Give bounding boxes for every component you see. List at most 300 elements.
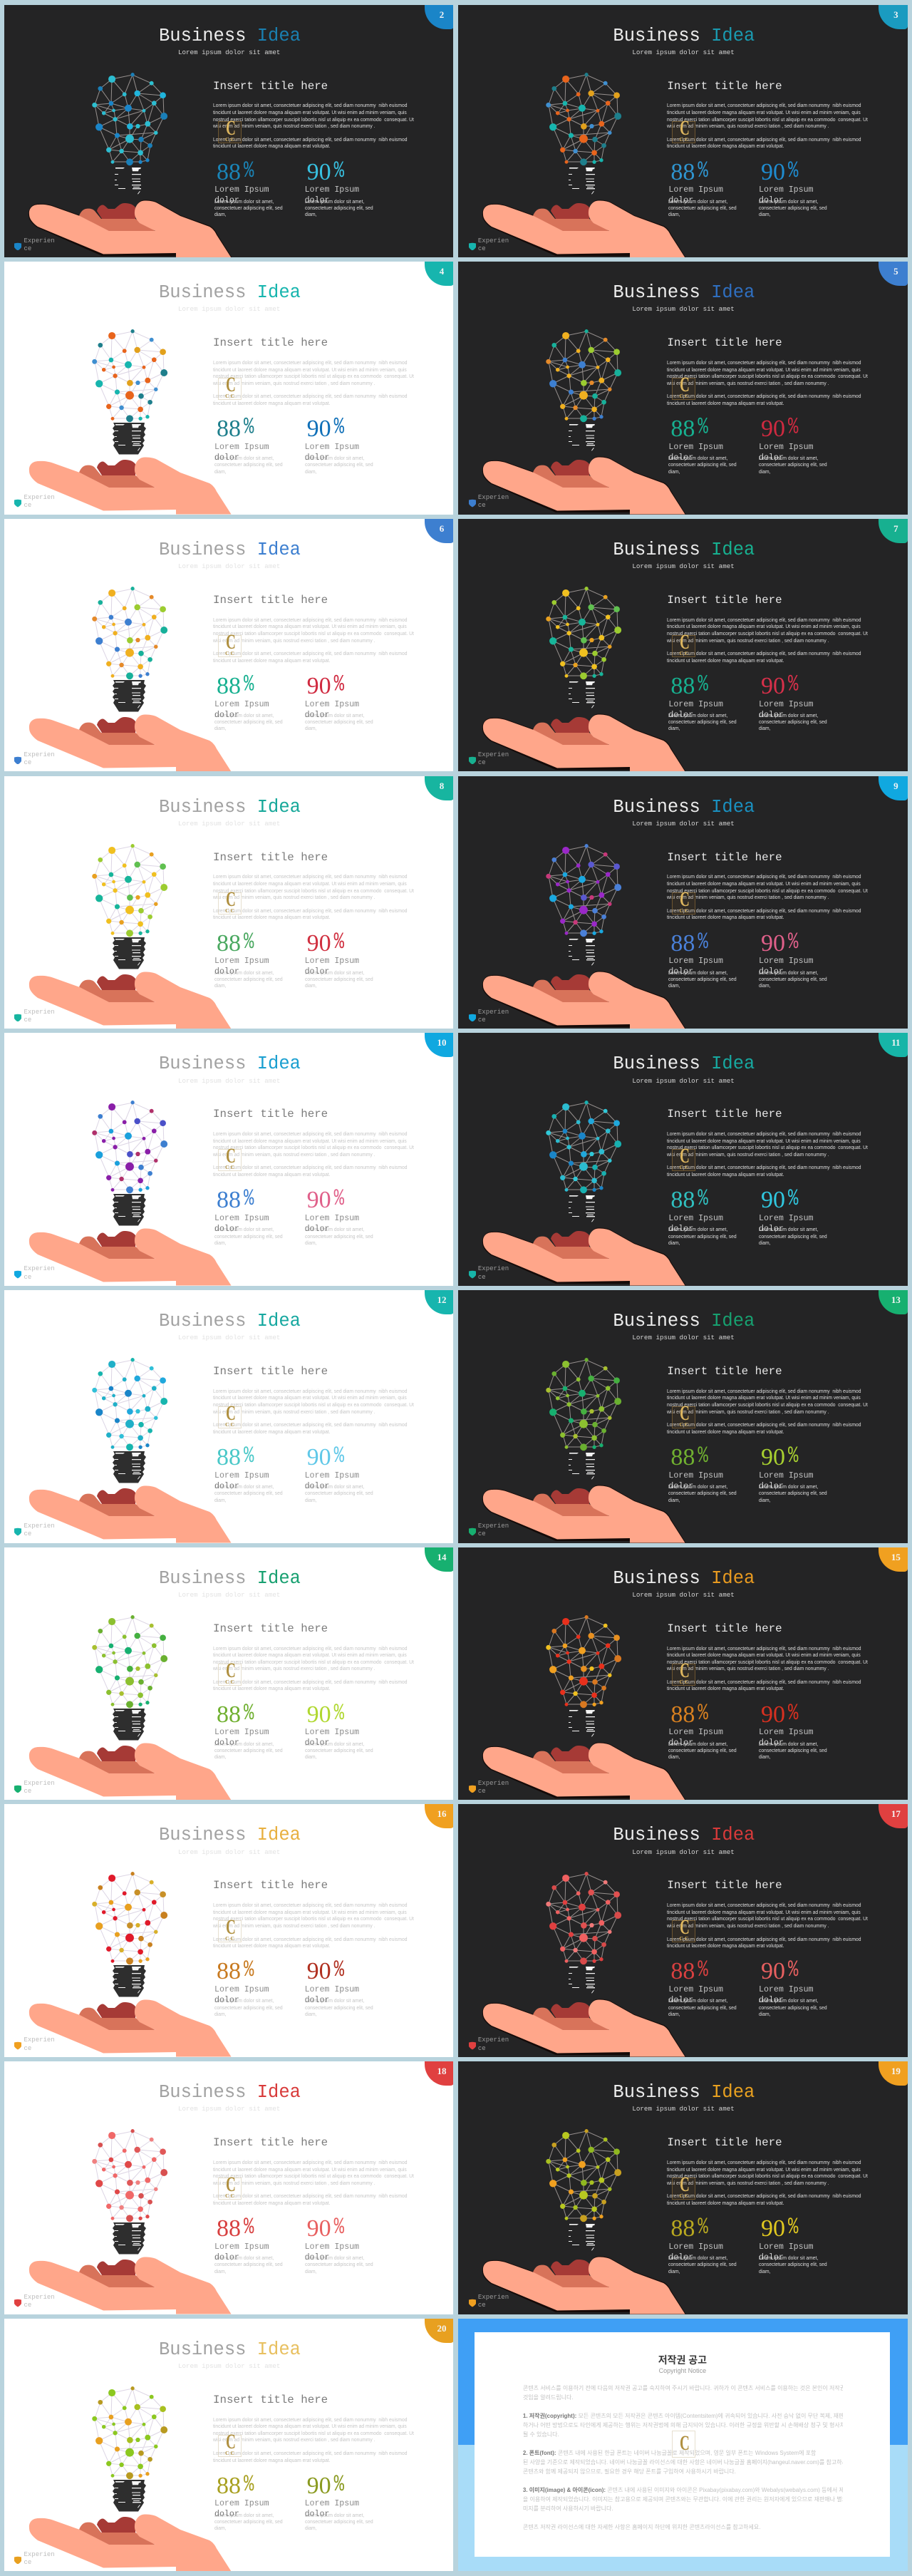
title: Business Idea: [613, 1825, 755, 1845]
stat 90 percent: %: [334, 415, 344, 441]
footer brand: Experien ce: [24, 751, 55, 766]
stat 88 percent: %: [698, 1701, 708, 1726]
watermark: C: [226, 1144, 235, 1168]
notice subtitle: Copyright Notice: [659, 2367, 706, 2374]
title: Business Idea: [613, 282, 755, 303]
title: Business Idea: [613, 1568, 755, 1589]
stat 88 percent: Lorem ipsum dolor sit amet, consectetuer adipiscing elit, sed diam,: [214, 1741, 283, 1760]
illustration: hand: [480, 1483, 688, 1542]
stat 90 percent: Lorem ipsum dolor sit amet, consectetuer adipiscing elit, sed diam,: [305, 1483, 373, 1503]
stat 90 percent: 90: [307, 1444, 331, 1470]
title: Business Idea: [159, 2082, 301, 2103]
stat 88 percent: %: [244, 929, 254, 955]
stat 88 percent: Lorem ipsum dolor sit amet, consectetuer adipiscing elit, sed diam,: [668, 455, 737, 475]
icon: shield: [14, 757, 21, 764]
stat 88 percent: 88: [217, 930, 241, 957]
stat 88 percent: dolor: [214, 711, 239, 720]
stat 88 percent: Lorem Ipsum: [214, 957, 269, 966]
slide 18: [4, 2061, 453, 2314]
icon: shield: [14, 2556, 21, 2564]
icon: shield: [469, 2299, 476, 2307]
illustration: hand: [482, 200, 685, 257]
icon: lightbulb network: [92, 587, 168, 711]
watermark: C: [680, 1915, 690, 1939]
page number badge: [879, 1290, 908, 1314]
stat 88 percent: [214, 2216, 303, 2277]
body text: Lorem ipsum dolor sit amet, consectetuer adipiscing elit, sed diam nonummy nibh euismod tincidunt ut laoreet dolore magna aliquam erat volutpat. Ut wisi enim ad minim veniam, quis nostrud exerci tation ullamcorper suscipit lobortis nisl ut aliquip ex ea commodo consequat. Ut wisi enim ad minim veniam, quis nostrud exerci tation , sed diam nonummy .: [213, 2416, 414, 2443]
illustration: hand: [28, 458, 231, 515]
footer brand: Experien ce: [24, 2294, 55, 2309]
stat 88 percent: Lorem ipsum dolor sit amet, consectetuer adipiscing elit, sed diam,: [668, 1997, 737, 2017]
watermark: [672, 121, 695, 143]
page number badge: [879, 1547, 908, 1572]
watermark: [218, 1149, 242, 1171]
stat 88 percent: Lorem Ipsum: [214, 2242, 269, 2252]
body text second paragraph: Lorem ipsum dolor sit amet, consectetuer adipiscing elit, sed diam nonummy nibh euismod tincidunt ut laoreet dolore magna aliquam erat volutpat.: [213, 136, 407, 149]
stat 90 percent: [304, 2216, 393, 2277]
watermark: [218, 2178, 242, 2200]
icon: shield: [469, 2041, 476, 2050]
stat 88 percent: Lorem Ipsum: [214, 2499, 269, 2508]
stat 88 percent: %: [244, 1443, 254, 1470]
body text second paragraph: Lorem ipsum dolor sit amet, consectetuer adipiscing elit, sed diam nonummy nibh euismod tincidunt ut laoreet dolore magna aliquam erat volutpat.: [213, 1421, 407, 1435]
stat 88 percent: 88: [670, 1701, 695, 1728]
icon: shield: [469, 1270, 476, 1279]
watermark: [218, 2435, 242, 2457]
page number badge: 19: [891, 2066, 901, 2076]
stat 90 percent: %: [788, 158, 798, 184]
page number badge: [879, 262, 908, 286]
stat 90 percent: %: [334, 672, 344, 698]
title: Business Idea: [159, 282, 301, 303]
stat 90 percent: Lorem Ipsum: [759, 957, 814, 966]
watermark: [218, 1664, 242, 1686]
body text second paragraph: Lorem ipsum dolor sit amet, consectetuer adipiscing elit, sed diam nonummy nibh euismod tincidunt ut laoreet dolore magna aliquam erat volutpat.: [667, 1421, 861, 1435]
section heading: Insert title here: [667, 851, 782, 864]
illustration: hand: [26, 2511, 234, 2571]
stat 90 percent: dolor: [759, 2253, 784, 2262]
stat 88 percent: Lorem ipsum dolor sit amet, consectetuer adipiscing elit, sed diam,: [668, 198, 737, 217]
stat 90 percent: Lorem ipsum dolor sit amet, consectetuer adipiscing elit, sed diam,: [305, 1226, 373, 1246]
icon: shield: [14, 2299, 21, 2307]
stat 90 percent: 90: [307, 1187, 331, 1213]
body text second paragraph: Lorem ipsum dolor sit amet, consectetuer adipiscing elit, sed diam nonummy nibh euismod tincidunt ut laoreet dolore magna aliquam erat volutpat.: [667, 2193, 861, 2206]
stat 90 percent: Lorem Ipsum: [305, 1471, 359, 1480]
stat 90 percent: [304, 1959, 393, 2019]
section heading: Insert title here: [213, 336, 328, 349]
watermark: [672, 1406, 695, 1428]
stat 90 percent: Lorem ipsum dolor sit amet, consectetuer adipiscing elit, sed diam,: [759, 198, 827, 217]
title: Business Idea: [613, 797, 755, 818]
subtitle: Lorem ipsum dolor sit amet: [178, 1334, 280, 1341]
stat 90 percent: dolor: [759, 1996, 784, 2005]
body text second paragraph: Lorem ipsum dolor sit amet, consectetuer adipiscing elit, sed diam nonummy nibh euismod tincidunt ut laoreet dolore magna aliquam erat volutpat.: [667, 393, 861, 406]
stat 88 percent: Lorem ipsum dolor sit amet, consectetuer adipiscing elit, sed diam,: [214, 1226, 283, 1246]
icon: lightbulb network: [90, 2383, 175, 2518]
page number badge: 15: [891, 1552, 901, 1562]
stat 88 percent: Lorem Ipsum: [668, 1214, 723, 1223]
stat 88 percent: dolor: [668, 1225, 693, 1234]
stat 90 percent: Lorem ipsum dolor sit amet, consectetuer adipiscing elit, sed diam,: [305, 198, 373, 217]
body text second paragraph: Lorem ipsum dolor sit amet, consectetuer adipiscing elit, sed diam nonummy nibh euismod tincidunt ut laoreet dolore magna aliquam erat volutpat.: [213, 2193, 407, 2206]
stat 90 percent: dolor: [305, 967, 329, 977]
illustration: hand: [26, 2254, 234, 2314]
watermark: CC: [225, 650, 236, 656]
icon: lightbulb network: [92, 73, 168, 194]
stat 90 percent: Lorem ipsum dolor sit amet, consectetuer adipiscing elit, sed diam,: [759, 1226, 827, 1246]
slide 20: [4, 2319, 453, 2571]
stat 88 percent: %: [244, 1957, 254, 1984]
stat 88 percent: dolor: [214, 1225, 239, 1234]
stat 88 percent: Lorem ipsum dolor sit amet, consectetuer adipiscing elit, sed diam,: [214, 969, 283, 989]
stat 88 percent: [668, 931, 757, 991]
illustration: hand: [28, 972, 231, 1029]
watermark: C: [680, 1401, 690, 1425]
footer brand: Experien ce: [24, 2036, 55, 2052]
stat 90 percent: Lorem ipsum dolor sit amet, consectetuer adipiscing elit, sed diam,: [305, 969, 373, 989]
stat 90 percent: 90: [307, 2473, 331, 2499]
stat 90 percent: %: [788, 2215, 798, 2241]
subtitle: Lorem ipsum dolor sit amet: [632, 1591, 735, 1599]
subtitle: Lorem ipsum dolor sit amet: [632, 2105, 735, 2113]
icon: lightbulb network: [546, 329, 621, 450]
subtitle: Lorem ipsum dolor sit amet: [178, 2362, 280, 2370]
body text: Lorem ipsum dolor sit amet, consectetuer adipiscing elit, sed diam nonummy nibh euismod tincidunt ut laoreet dolore magna aliquam erat volutpat. Ut wisi enim ad minim veniam, quis nostrud exerci tation ullamcorper suscipit lobortis nisl ut aliquip ex ea commodo consequat. Ut wisi enim ad minim veniam, quis nostrud exerci tation , sed diam nonummy .: [667, 102, 868, 129]
stat 88 percent: 88: [217, 1701, 241, 1728]
icon: lightbulb network: [92, 844, 168, 969]
body text: Lorem ipsum dolor sit amet, consectetuer adipiscing elit, sed diam nonummy nibh euismod tincidunt ut laoreet dolore magna aliquam erat volutpat. Ut wisi enim ad minim veniam, quis nostrud exerci tation ullamcorper suscipit lobortis nisl ut aliquip ex ea commodo consequat. Ut wisi enim ad minim veniam, quis nostrud exerci tation , sed diam nonummy .: [667, 1388, 868, 1415]
stat 88 percent: dolor: [214, 967, 239, 977]
body text: Lorem ipsum dolor sit amet, consectetuer adipiscing elit, sed diam nonummy nibh euismod tincidunt ut laoreet dolore magna aliquam erat volutpat. Ut wisi enim ad minim veniam, quis nostrud exerci tation ullamcorper suscipit lobortis nisl ut aliquip ex ea commodo consequat. Ut wisi enim ad minim veniam, quis nostrud exerci tation , sed diam nonummy .: [667, 873, 868, 900]
page number badge: [879, 1033, 908, 1057]
stat 88 percent: [214, 2473, 303, 2534]
body text second paragraph: Lorem ipsum dolor sit amet, consectetuer adipiscing elit, sed diam nonummy nibh euismod tincidunt ut laoreet dolore magna aliquam erat volutpat.: [667, 1164, 861, 1178]
body text: Lorem ipsum dolor sit amet, consectetuer adipiscing elit, sed diam nonummy nibh euismod tincidunt ut laoreet dolore magna aliquam erat volutpat. Ut wisi enim ad minim veniam, quis nostrud exerci tation ullamcorper suscipit lobortis nisl ut aliquip ex ea commodo consequat. Ut wisi enim ad minim veniam, quis nostrud exerci tation , sed diam nonummy .: [213, 1388, 414, 1415]
stat 88 percent: %: [698, 415, 708, 441]
slide 11: [458, 1033, 908, 1286]
watermark: CC: [679, 1421, 690, 1428]
watermark: CC: [679, 1164, 690, 1170]
watermark: CC: [225, 2193, 236, 2199]
stat 88 percent: %: [698, 158, 708, 184]
body text second paragraph: Lorem ipsum dolor sit amet, consectetuer adipiscing elit, sed diam nonummy nibh euismod tincidunt ut laoreet dolore magna aliquam erat volutpat.: [667, 1936, 861, 1949]
watermark: C: [680, 887, 690, 911]
icon: lightbulb network: [90, 1612, 175, 1747]
page number badge: 11: [891, 1037, 901, 1048]
stat 90 percent: %: [334, 1701, 344, 1726]
stat 88 percent: Lorem Ipsum: [668, 1471, 723, 1480]
page number badge: 6: [440, 523, 444, 534]
stat 88 percent: 88: [670, 416, 695, 442]
section heading: Insert title here: [213, 2136, 328, 2149]
watermark: CC: [225, 1421, 236, 1428]
title: Business Idea: [159, 797, 301, 818]
section heading: Insert title here: [667, 2136, 782, 2149]
stat 90 percent: Lorem Ipsum: [305, 1214, 359, 1223]
stat 88 percent: [214, 929, 283, 989]
footer brand: Experien ce: [478, 2036, 509, 2052]
subtitle: Lorem ipsum dolor sit amet: [632, 48, 735, 56]
stat 90 percent: Lorem ipsum dolor sit amet, consectetuer adipiscing elit, sed diam,: [759, 969, 827, 989]
stat 90 percent: 90: [307, 1701, 331, 1728]
footer brand: Experien ce: [478, 751, 509, 766]
body text second paragraph: Lorem ipsum dolor sit amet, consectetuer adipiscing elit, sed diam nonummy nibh euismod tincidunt ut laoreet dolore magna aliquam erat volutpat.: [213, 1164, 407, 1178]
slide 16: [4, 1804, 453, 2057]
section heading: Insert title here: [667, 1622, 782, 1635]
body text: Lorem ipsum dolor sit amet, consectetuer adipiscing elit, sed diam nonummy nibh euismod tincidunt ut laoreet dolore magna aliquam erat volutpat. Ut wisi enim ad minim veniam, quis nostrud exerci tation ullamcorper suscipit lobortis nisl ut aliquip ex ea commodo consequat. Ut wisi enim ad minim veniam, quis nostrud exerci tation , sed diam nonummy .: [667, 1902, 868, 1929]
watermark: C: [226, 1401, 235, 1425]
stat 90 percent: 90: [307, 673, 331, 699]
stat 88 percent: [668, 1959, 757, 2019]
stat 88 percent: %: [244, 672, 254, 698]
icon: shield: [14, 1785, 21, 1793]
stat 88 percent: Lorem Ipsum: [668, 2242, 723, 2252]
stat 88 percent: %: [698, 1186, 708, 1212]
page number badge: [425, 2061, 454, 2086]
stat 90 percent: Lorem Ipsum: [305, 443, 359, 452]
illustration: hand: [26, 1997, 234, 2057]
title: Business Idea: [159, 2339, 301, 2360]
section heading: Insert title here: [667, 336, 782, 349]
stat 90 percent: %: [334, 2215, 344, 2241]
stat 88 percent: 88: [670, 1187, 695, 1213]
body text: Lorem ipsum dolor sit amet, consectetuer adipiscing elit, sed diam nonummy nibh euismod tincidunt ut laoreet dolore magna aliquam erat volutpat. Ut wisi enim ad minim veniam, quis nostrud exerci tation ullamcorper suscipit lobortis nisl ut aliquip ex ea commodo consequat. Ut wisi enim ad minim veniam, quis nostrud exerci tation , sed diam nonummy .: [213, 359, 414, 386]
stat 90 percent: Lorem Ipsum: [759, 185, 814, 195]
illustration: hand: [28, 200, 232, 257]
slide 14: [4, 1547, 453, 1800]
stat 88 percent: 88: [217, 158, 241, 185]
stat 90 percent: Lorem ipsum dolor sit amet, consectetuer adipiscing elit, sed diam,: [305, 1741, 373, 1760]
stat 88 percent: Lorem Ipsum: [668, 957, 723, 966]
subtitle: Lorem ipsum dolor sit amet: [632, 820, 735, 828]
watermark: [672, 635, 695, 657]
stat 88 percent: dolor: [668, 2253, 693, 2262]
watermark: CC: [679, 907, 690, 914]
stat 90 percent: Lorem Ipsum: [759, 1214, 814, 1223]
stat 88 percent: Lorem ipsum dolor sit amet, consectetuer adipiscing elit, sed diam,: [668, 1741, 737, 1760]
stat 90 percent: dolor: [759, 1482, 784, 1491]
page number badge: [425, 776, 454, 800]
icon: shield: [469, 1014, 476, 1021]
watermark: CC: [225, 1935, 236, 1942]
title: Business Idea: [613, 26, 755, 46]
stat 88 percent: %: [698, 2215, 708, 2241]
subtitle: Lorem ipsum dolor sit amet: [178, 562, 280, 570]
icon: lightbulb network: [544, 1868, 629, 2004]
page number badge: 18: [437, 2066, 446, 2076]
watermark: CC: [225, 1164, 236, 1170]
page number badge: [879, 4, 908, 29]
stat 88 percent: Lorem ipsum dolor sit amet, consectetuer adipiscing elit, sed diam,: [214, 2255, 283, 2274]
stat 90 percent: 90: [761, 2215, 785, 2242]
icon: lightbulb network: [90, 1868, 175, 2004]
stat 90 percent: [758, 931, 847, 991]
page number badge: 17: [891, 1808, 901, 1819]
watermark: C: [226, 2430, 235, 2453]
watermark: CC: [225, 393, 236, 399]
stat 88 percent: %: [244, 2472, 254, 2498]
stat 88 percent: [668, 672, 737, 731]
stat 90 percent: 90: [761, 1701, 785, 1728]
stat 88 percent: [668, 2216, 757, 2277]
stat 90 percent: [758, 1959, 847, 2019]
stat 90 percent: %: [788, 1443, 798, 1470]
body text: Lorem ipsum dolor sit amet, consectetuer adipiscing elit, sed diam nonummy nibh euismod tincidunt ut laoreet dolore magna aliquam erat volutpat. Ut wisi enim ad minim veniam, quis nostrud exerci tation ullamcorper suscipit lobortis nisl ut aliquip ex ea commodo consequat. Ut wisi enim ad minim veniam, quis nostrud exerci tation , sed diam nonummy .: [667, 617, 868, 644]
stat 88 percent: Lorem ipsum dolor sit amet, consectetuer adipiscing elit, sed diam,: [668, 712, 737, 731]
notice title: 저작권 공고: [658, 2354, 707, 2366]
stat 88 percent: [214, 1702, 303, 1763]
page number badge: 16: [437, 1808, 446, 1819]
stat 90 percent: Lorem Ipsum: [305, 2499, 359, 2508]
stat 90 percent: 90: [307, 158, 331, 185]
section heading: Insert title here: [213, 594, 328, 607]
stat 90 percent: 90: [307, 930, 331, 957]
stat 88 percent: Lorem Ipsum: [214, 700, 269, 709]
stat 90 percent: %: [334, 1957, 344, 1984]
icon: lightbulb network: [90, 1354, 175, 1490]
title: Business Idea: [159, 540, 301, 560]
stat 90 percent: dolor: [305, 1738, 329, 1748]
slide 3: [458, 4, 908, 257]
watermark: C: [680, 1659, 690, 1682]
title: Business Idea: [613, 540, 755, 560]
watermark: C: [680, 1144, 690, 1168]
stat 88 percent: Lorem Ipsum: [668, 185, 723, 195]
stat 90 percent: Lorem ipsum dolor sit amet, consectetuer adipiscing elit, sed diam,: [759, 1741, 827, 1760]
stat 90 percent: Lorem Ipsum: [759, 1985, 814, 1994]
footer brand: Experien ce: [478, 1523, 509, 1537]
watermark: C: [226, 887, 235, 911]
title: Business Idea: [159, 1568, 301, 1589]
stat 90 percent: dolor: [305, 2253, 329, 2262]
footer brand: Experien ce: [24, 1523, 55, 1537]
section heading: Insert title here: [667, 1365, 782, 1378]
stat 90 percent: Lorem Ipsum: [759, 700, 814, 709]
subtitle: Lorem ipsum dolor sit amet: [178, 1591, 280, 1599]
body text: Lorem ipsum dolor sit amet, consectetuer adipiscing elit, sed diam nonummy nibh euismod tincidunt ut laoreet dolore magna aliquam erat volutpat. Ut wisi enim ad minim veniam, quis nostrud exerci tation ullamcorper suscipit lobortis nisl ut aliquip ex ea commodo consequat. Ut wisi enim ad minim veniam, quis nostrud exerci tation , sed diam nonummy .: [213, 617, 414, 644]
stat 90 percent: dolor: [759, 967, 784, 977]
stat 90 percent: Lorem ipsum dolor sit amet, consectetuer adipiscing elit, sed diam,: [759, 2255, 827, 2274]
page number badge: 4: [440, 266, 444, 277]
stat 90 percent: Lorem ipsum dolor sit amet, consectetuer adipiscing elit, sed diam,: [759, 455, 827, 475]
body text: Lorem ipsum dolor sit amet, consectetuer adipiscing elit, sed diam nonummy nibh euismod tincidunt ut laoreet dolore magna aliquam erat volutpat. Ut wisi enim ad minim veniam, quis nostrud exerci tation ullamcorper suscipit lobortis nisl ut aliquip ex ea commodo consequat. Ut wisi enim ad minim veniam, quis nostrud exerci tation , sed diam nonummy .: [213, 1130, 414, 1158]
stat 88 percent: dolor: [214, 453, 239, 463]
slide 15: [458, 1547, 908, 1800]
watermark: CC: [225, 135, 236, 143]
stat 88 percent: Lorem Ipsum: [214, 1728, 269, 1737]
stat 88 percent: %: [244, 415, 254, 441]
page number badge: [879, 1804, 908, 1828]
page number badge: 20: [437, 2323, 446, 2334]
stat 88 percent: 88: [670, 2215, 695, 2242]
stat 90 percent: 90: [761, 158, 785, 185]
body text second paragraph: Lorem ipsum dolor sit amet, consectetuer adipiscing elit, sed diam nonummy nibh euismod tincidunt ut laoreet dolore magna aliquam erat volutpat.: [213, 907, 407, 920]
icon: shield: [469, 1785, 476, 1793]
stat 88 percent: Lorem ipsum dolor sit amet, consectetuer adipiscing elit, sed diam,: [214, 198, 283, 217]
stat 90 percent: dolor: [759, 453, 784, 463]
stat 88 percent: [668, 1187, 757, 1248]
stat 88 percent: 88: [670, 1958, 695, 1984]
stat 90 percent: [759, 672, 827, 731]
stat 88 percent: Lorem ipsum dolor sit amet, consectetuer adipiscing elit, sed diam,: [214, 1483, 283, 1503]
body text second paragraph: Lorem ipsum dolor sit amet, consectetuer adipiscing elit, sed diam nonummy nibh euismod tincidunt ut laoreet dolore magna aliquam erat volutpat.: [213, 393, 407, 406]
stat 88 percent: dolor: [668, 711, 693, 720]
stat 88 percent: 88: [670, 930, 695, 957]
subtitle: Lorem ipsum dolor sit amet: [632, 1334, 735, 1341]
stat 88 percent: dolor: [214, 196, 239, 205]
stat 90 percent: 90: [761, 673, 785, 699]
panel: notice card: [475, 2332, 890, 2557]
notice body text: 콘텐츠 저작권 라이선스에 대한 자세한 사항은 홈페이지 하단에 위치한 콘텐츠라이선스를 참고하세요.: [523, 2524, 760, 2530]
page number badge: [425, 2319, 454, 2343]
page number badge: 12: [437, 1294, 446, 1305]
stat 88 percent: Lorem ipsum dolor sit amet, consectetuer adipiscing elit, sed diam,: [668, 1483, 737, 1503]
stat 88 percent: Lorem Ipsum: [214, 1985, 269, 1994]
illustration: hand: [26, 1225, 234, 1286]
section heading: Insert title here: [213, 851, 328, 864]
body text: Lorem ipsum dolor sit amet, consectetuer adipiscing elit, sed diam nonummy nibh euismod tincidunt ut laoreet dolore magna aliquam erat volutpat. Ut wisi enim ad minim veniam, quis nostrud exerci tation ullamcorper suscipit lobortis nisl ut aliquip ex ea commodo consequat. Ut wisi enim ad minim veniam, quis nostrud exerci tation , sed diam nonummy .: [213, 102, 414, 129]
stat 88 percent: Lorem ipsum dolor sit amet, consectetuer adipiscing elit, sed diam,: [214, 1997, 283, 2017]
watermark: C: [680, 373, 690, 396]
slide 12: [4, 1290, 453, 1542]
icon: lightbulb network: [546, 73, 621, 194]
footer brand: Experien ce: [478, 1265, 509, 1280]
illustration: hand: [26, 1740, 234, 1800]
stat 88 percent: dolor: [668, 1482, 693, 1491]
stat 88 percent: %: [244, 1186, 254, 1212]
stat 88 percent: dolor: [214, 1482, 239, 1491]
stat 88 percent: dolor: [214, 1738, 239, 1748]
watermark: C: [226, 630, 235, 654]
stat 88 percent: %: [244, 158, 254, 184]
stat 90 percent: 90: [761, 416, 785, 442]
stat 88 percent: %: [698, 1443, 708, 1470]
stat 88 percent: dolor: [668, 196, 693, 205]
stat 90 percent: [758, 1702, 847, 1763]
stat 88 percent: %: [244, 1701, 254, 1726]
illustration: hand: [482, 714, 685, 771]
page number badge: 8: [440, 780, 444, 791]
section heading: Insert title here: [213, 1108, 328, 1120]
stat 90 percent: [758, 1445, 847, 1505]
stat 88 percent: 88: [217, 673, 241, 699]
stat 90 percent: Lorem ipsum dolor sit amet, consectetuer adipiscing elit, sed diam,: [759, 1483, 827, 1503]
watermark: CC: [225, 2450, 236, 2456]
watermark: C: [680, 630, 690, 654]
page number badge: 14: [437, 1552, 446, 1562]
stat 88 percent: Lorem Ipsum: [668, 443, 723, 452]
page number badge: 10: [437, 1037, 446, 1048]
stat 90 percent: dolor: [759, 196, 784, 205]
page number badge: 5: [893, 266, 898, 277]
stat 90 percent: [305, 158, 373, 217]
stat 90 percent: dolor: [305, 453, 329, 463]
stat 90 percent: Lorem ipsum dolor sit amet, consectetuer adipiscing elit, sed diam,: [305, 2255, 373, 2274]
page number badge: [879, 519, 908, 543]
slide 19: [458, 2061, 908, 2314]
subtitle: Lorem ipsum dolor sit amet: [178, 1077, 280, 1085]
stat 90 percent: [304, 931, 393, 991]
watermark: CC: [679, 135, 690, 143]
slide 17: [458, 1804, 908, 2057]
icon: shield: [14, 242, 21, 250]
watermark: [218, 1920, 242, 1942]
stat 90 percent: dolor: [305, 196, 329, 205]
stat 88 percent: 88: [217, 1187, 241, 1213]
stat 88 percent: %: [698, 1957, 708, 1984]
slide 4: [4, 262, 453, 515]
illustration: hand: [480, 2254, 688, 2314]
